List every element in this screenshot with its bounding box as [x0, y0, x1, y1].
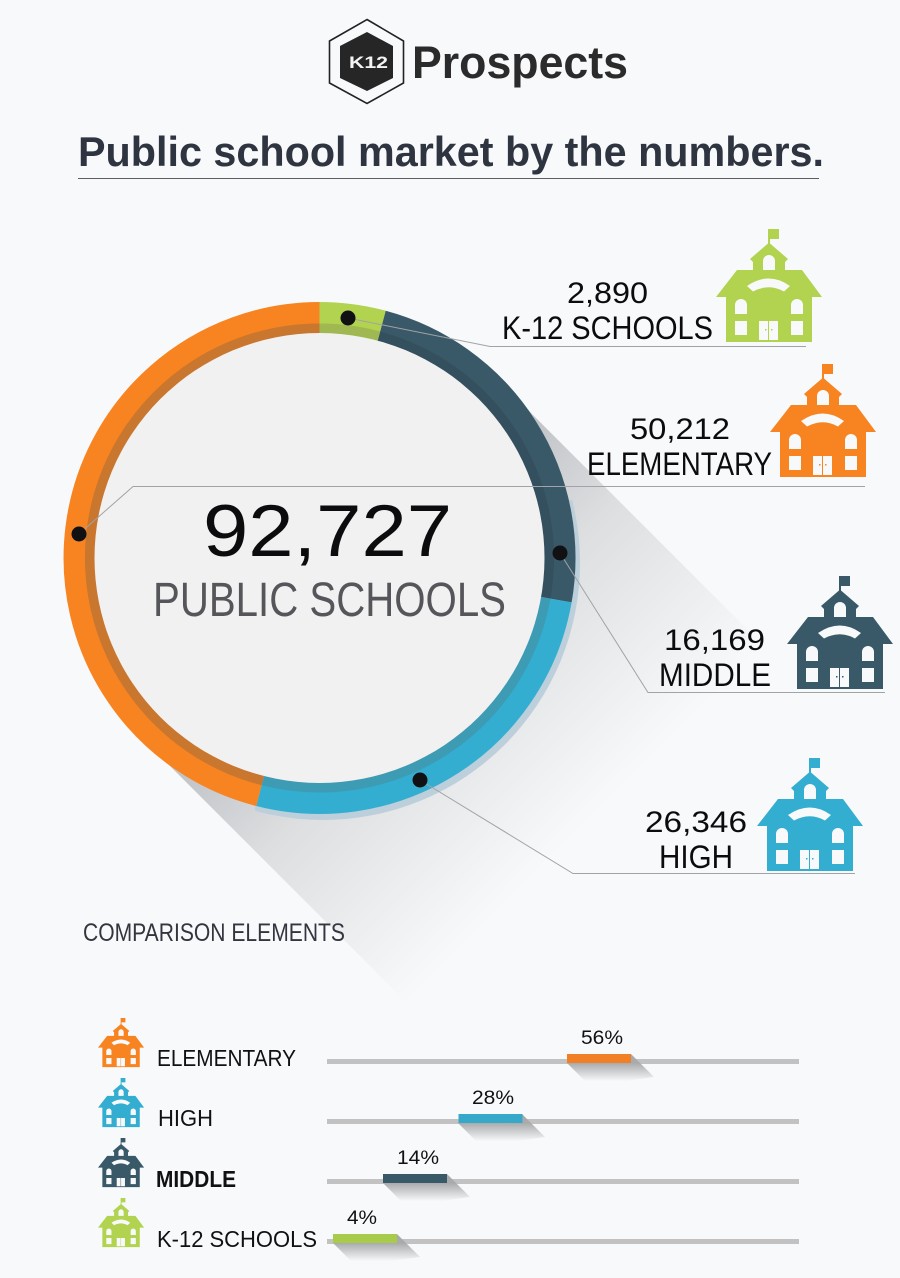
- ring shade: [255, 500, 580, 820]
- comparison row: high: HIGH: [158, 1105, 213, 1131]
- long shadow: [140, 380, 900, 1278]
- leader lines: [79, 318, 885, 874]
- icon: orange school: [770, 364, 876, 477]
- center disc: [94, 333, 544, 783]
- comparison row: elementary: [98, 1018, 799, 1086]
- icon: green school: [716, 229, 822, 342]
- icon: small green school: [98, 1198, 144, 1247]
- logo wordmark: Prospects: [412, 37, 628, 88]
- comparison row: middle: [98, 1138, 799, 1206]
- icon: small blue school: [98, 1078, 144, 1127]
- callout: elementary: [587, 364, 876, 482]
- callout: K-12 schools: 2,890: [567, 277, 648, 310]
- callout: high: [645, 758, 863, 875]
- logo: [330, 20, 628, 104]
- icon: small dark school: [98, 1138, 144, 1187]
- callout: K-12 schools: [502, 229, 822, 346]
- title: Public school market by the numbers.: [78, 128, 824, 175]
- callout: elementary: 50,212: [630, 413, 730, 446]
- leader dots: [72, 310, 568, 788]
- callout: elementary: ELEMENTARY: [587, 446, 772, 482]
- icon: dark slate school: [787, 576, 893, 689]
- callout: middle: [659, 576, 893, 693]
- comparison row: elementary: ELEMENTARY: [157, 1045, 296, 1071]
- comparison row: middle: MIDDLE: [156, 1166, 236, 1192]
- callout: middle: MIDDLE: [659, 657, 771, 693]
- center total: 92,727 public schools: 92,727: [203, 491, 452, 572]
- ring segment: elementary: [75, 313, 320, 795]
- callout: K-12 schools: K-12 SCHOOLS: [502, 310, 713, 346]
- comparison row: elementary: 56%: [581, 1028, 623, 1049]
- comparison row: high: 28%: [472, 1088, 514, 1109]
- ring segment: high: [259, 598, 561, 803]
- ring segment: middle: [379, 321, 565, 600]
- comparison row: K-12 schools: 4%: [347, 1208, 377, 1229]
- logo hexagon mark: [330, 20, 404, 104]
- comparison row: K-12 schools: [98, 1198, 799, 1266]
- callout: high: HIGH: [659, 839, 733, 875]
- comparison row: middle: 14%: [397, 1148, 439, 1169]
- section heading: comparison elements: COMPARISON ELEMENTS: [83, 919, 345, 947]
- ring segment: K-12: [320, 313, 383, 336]
- center total: 92,727 public schools: PUBLIC SCHOOLS: [153, 574, 506, 627]
- icon: small orange school: [98, 1018, 144, 1067]
- logo hexagon mark: K12: [349, 53, 388, 72]
- callout: middle: 16,169: [664, 624, 765, 657]
- center total: 92,727 public schools: [153, 491, 506, 627]
- comparison row: K-12 schools: K-12 SCHOOLS: [157, 1226, 317, 1252]
- donut chart: public schools total: [64, 302, 722, 960]
- comparison row: high: [98, 1078, 799, 1146]
- icon: blue school: [757, 758, 863, 871]
- callout: high: 26,346: [645, 806, 747, 839]
